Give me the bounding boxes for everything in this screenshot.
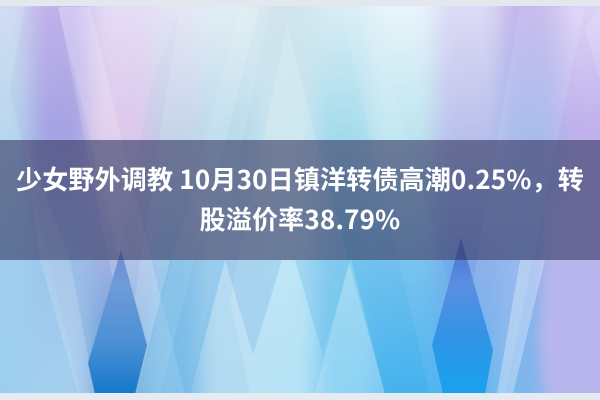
title text	[16, 160, 584, 237]
title text: 少女野外调教 10月30日镇洋转债高潮0.25%，转	[16, 160, 584, 197]
bright blue diamond	[432, 238, 493, 394]
translucent title band	[0, 140, 600, 260]
purple corner glow	[538, 200, 600, 400]
dark blue diamond	[88, 250, 147, 394]
title text: 股溢价率38.79%	[200, 200, 400, 237]
